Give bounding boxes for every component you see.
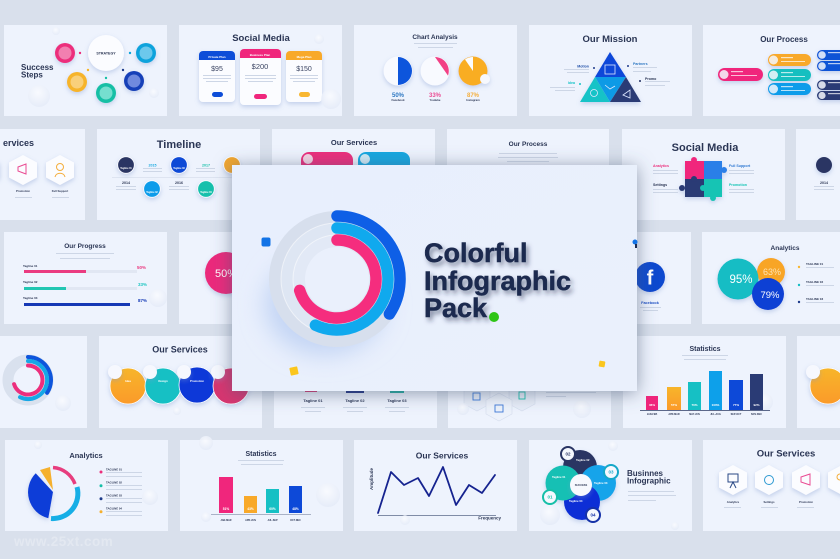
callout labels xyxy=(568,62,657,85)
hexagons xyxy=(719,465,840,495)
orbs xyxy=(34,441,158,505)
body lines xyxy=(628,491,676,501)
bubble values: 79% xyxy=(760,290,780,301)
panel: our services hexagons xyxy=(703,440,840,531)
legend xyxy=(100,468,142,516)
node captions: Tagline 03 xyxy=(173,167,185,170)
progress bars xyxy=(23,264,137,306)
pill text lines xyxy=(731,52,840,94)
heading: Our Process xyxy=(760,35,808,44)
pricing card 1: $95 xyxy=(211,66,223,73)
node xyxy=(816,157,832,173)
axis label: frequency: Frequency xyxy=(478,516,501,520)
panel: chart analysis xyxy=(354,25,517,116)
icon badges xyxy=(108,365,225,379)
orbs xyxy=(314,34,341,109)
percentages xyxy=(137,265,147,303)
years: 2015 xyxy=(148,164,156,168)
process pills xyxy=(718,50,840,100)
heading: ervices xyxy=(3,138,34,148)
legend xyxy=(798,262,834,303)
line series xyxy=(378,467,495,513)
panel: our services pills xyxy=(272,129,435,220)
node captions: Tagline 01 xyxy=(120,167,132,170)
legend: TAGLINE 01 xyxy=(106,468,122,472)
pie 1 xyxy=(384,56,412,86)
panel: our process text xyxy=(447,129,609,220)
bar chart: 60% xyxy=(269,507,276,511)
subtitle lines xyxy=(414,43,457,48)
orb xyxy=(55,395,71,411)
bar chart: OCT-DEC xyxy=(290,519,301,522)
node captions: Tagline 04 xyxy=(200,191,212,194)
years: 2016 xyxy=(175,181,183,185)
facebook circle xyxy=(635,262,665,292)
pricing card 3: $150 xyxy=(296,66,312,73)
cluster labels: Tagline 03 xyxy=(594,481,608,485)
heading: Our Process xyxy=(509,141,548,148)
orbs xyxy=(540,441,679,530)
connector dots xyxy=(79,52,131,79)
ring chart xyxy=(8,357,51,400)
panel: our process pills xyxy=(703,25,840,116)
strategy hub: STRATEGY xyxy=(96,52,116,56)
bar chart: NOV-DEC xyxy=(751,413,762,416)
callout text lines xyxy=(550,67,670,91)
green dot xyxy=(489,312,499,322)
callout labels: Motion xyxy=(577,64,589,68)
pie chart xyxy=(28,467,78,519)
number badges: 04 xyxy=(590,513,596,518)
bar chart: JUL-SEP xyxy=(267,519,278,522)
panel: social media pricing xyxy=(179,25,342,116)
hero title: Infographic xyxy=(424,266,571,296)
orb xyxy=(149,289,167,307)
puzzle labels: Analytics xyxy=(653,164,669,168)
bar chart: APR-MAR xyxy=(668,413,680,416)
panel: our services circles xyxy=(99,336,262,428)
label: Facebook xyxy=(641,301,660,305)
stat circle xyxy=(205,252,247,294)
service labels: Design xyxy=(158,379,168,383)
description lines xyxy=(116,168,215,190)
bar chart: 100% xyxy=(712,403,720,407)
orb xyxy=(173,407,181,415)
puzzle labels: Promotion xyxy=(729,183,747,187)
orb xyxy=(755,393,773,411)
bar chart: APR-JUN xyxy=(245,519,256,522)
percentages: 33% xyxy=(138,282,147,287)
axis label: amplitude: Amplitude xyxy=(369,468,374,490)
bar chart: JUL-AUG xyxy=(710,413,721,416)
heading: Businnes xyxy=(627,469,664,478)
pie labels: Youtube xyxy=(430,98,441,102)
progress bars: Tagline 02 xyxy=(23,280,38,284)
panel: analytics bubbles xyxy=(702,232,840,324)
pricing card 3: Mega Plan xyxy=(297,55,312,59)
heading: Timeline xyxy=(157,139,201,151)
hero title: Colorful xyxy=(424,238,527,268)
bar chart: 57% xyxy=(671,403,677,407)
axis xyxy=(378,514,496,517)
heading: Our Progress xyxy=(64,243,106,250)
pricing card 2: $200 xyxy=(252,62,268,71)
bubble values: 63% xyxy=(763,267,781,277)
heading: Our Mission xyxy=(583,34,638,45)
percentages: 87% xyxy=(138,298,147,303)
pricing card 2: Business Plan xyxy=(250,53,270,57)
progress bars: Tagline 03 xyxy=(23,296,38,300)
panel: orange service cropped xyxy=(797,336,840,428)
pie labels: Facebook xyxy=(391,98,405,102)
captions: Analytics xyxy=(727,500,740,504)
panel: facebook circle stat xyxy=(179,232,342,324)
tagline 01: Tagline 01 xyxy=(303,398,323,403)
subtitle lines xyxy=(682,355,728,360)
bar chart: 70% xyxy=(691,403,698,407)
tagline 02 xyxy=(343,398,367,412)
pricing card 3 xyxy=(286,51,322,102)
tagline 03 xyxy=(385,398,409,412)
bar chart: 48% xyxy=(292,507,299,511)
heading: Social Media xyxy=(672,142,739,154)
panel: line chart xyxy=(354,440,517,531)
heading: Our Services xyxy=(416,450,468,460)
subtitle lines xyxy=(56,253,114,259)
hexagons xyxy=(464,383,535,421)
icon badge xyxy=(806,365,820,379)
center hub: SUCCESS xyxy=(575,483,588,487)
puzzle labels: Full Support xyxy=(729,164,751,168)
step circles xyxy=(55,43,156,103)
ring chart xyxy=(265,211,405,355)
panel: statistics six bars xyxy=(623,336,786,428)
description lines xyxy=(653,170,754,193)
tagline 02: Tagline 02 xyxy=(345,398,365,403)
panel: our mission xyxy=(529,25,692,116)
panel: services hexagons cropped xyxy=(0,129,85,220)
years: 2017 xyxy=(202,164,210,168)
bubble values: 95% xyxy=(729,274,753,286)
tagline 03: Tagline 03 xyxy=(387,398,407,403)
cluster labels: Tagline 01 xyxy=(552,475,566,479)
heading: Our Services xyxy=(152,344,208,354)
panel: taglines xyxy=(274,336,437,428)
service labels: Promotion xyxy=(190,379,204,383)
text lines xyxy=(546,392,596,397)
panel: success steps xyxy=(4,25,167,116)
service labels xyxy=(125,379,204,383)
confetti: yellow square small xyxy=(599,361,605,367)
facebook circle: f xyxy=(647,268,654,290)
captions: Settings xyxy=(763,500,775,504)
number badges xyxy=(543,447,618,522)
heading: Social Media xyxy=(232,33,290,44)
pie labels xyxy=(391,93,480,102)
hex icons xyxy=(18,164,65,177)
pie 2 xyxy=(420,56,450,86)
panel: analytics pie xyxy=(5,440,168,531)
bubble values xyxy=(729,267,781,301)
legend: TAGLINE 03 xyxy=(806,297,823,301)
service circles xyxy=(110,367,249,404)
puzzle labels xyxy=(653,164,751,187)
bar chart: 51% xyxy=(223,507,229,511)
hex icons xyxy=(728,474,840,488)
heading: Statistics xyxy=(689,346,721,353)
panel: facebook icon xyxy=(528,232,691,324)
pie labels: 87% xyxy=(467,93,480,99)
year: 2014 xyxy=(820,181,828,185)
cluster labels: Tagline 04 xyxy=(569,499,583,503)
bar chart: MAY-JUN xyxy=(689,413,700,416)
pricing card 2 xyxy=(240,49,281,105)
legend: TAGLINE 04 xyxy=(106,506,122,510)
percentages: 50% xyxy=(137,265,146,270)
circle cluster xyxy=(546,450,616,520)
axis line xyxy=(112,176,242,179)
node captions xyxy=(120,167,212,194)
bar chart: JAN-MAR xyxy=(220,519,232,522)
confetti: yellow square large xyxy=(289,366,299,376)
legend: TAGLINE 02 xyxy=(806,280,823,284)
progress bars: Tagline 01 xyxy=(23,264,38,268)
panel: timeline xyxy=(97,129,260,220)
years xyxy=(122,164,210,185)
captions: Promotion xyxy=(799,500,813,504)
strategy hub xyxy=(88,35,124,71)
pie labels: 50% xyxy=(392,93,405,99)
timeline nodes xyxy=(118,157,240,197)
callout labels: Idea xyxy=(568,81,576,85)
bar chart: JAN-FEB xyxy=(647,413,657,416)
pricing card 1 xyxy=(199,51,235,102)
node captions: Tagline 02 xyxy=(146,191,158,194)
peek of icons xyxy=(305,388,404,393)
service labels: Idea xyxy=(125,379,131,383)
panel: statistics four bars xyxy=(180,436,343,531)
heading: success steps: Steps xyxy=(21,70,43,80)
bar chart: 92% xyxy=(753,403,760,407)
confetti: blue square xyxy=(262,238,270,246)
number badges: 02 xyxy=(565,452,571,457)
bar chart: 36% xyxy=(649,403,655,407)
legend: TAGLINE 01 xyxy=(806,262,823,266)
number badges: 03 xyxy=(608,470,614,475)
captions: Promotion xyxy=(16,189,30,193)
legend: TAGLINE 02 xyxy=(106,480,122,484)
bubbles xyxy=(718,258,785,310)
subtitle lines xyxy=(238,460,284,465)
hex icons xyxy=(473,392,525,412)
callout labels: Partners xyxy=(633,62,648,66)
pie labels: 33% xyxy=(429,93,442,99)
bar chart: 43% xyxy=(247,507,254,511)
description lines xyxy=(814,186,834,190)
puzzle xyxy=(679,157,727,201)
orb xyxy=(400,515,410,525)
confetti: blue edge mark xyxy=(632,240,638,248)
callout dots xyxy=(579,65,641,85)
orbs xyxy=(28,27,159,107)
panel: hexagon cluster xyxy=(448,336,611,428)
pie labels: Instagram xyxy=(466,98,480,102)
panel: mini ring chart xyxy=(0,336,87,428)
pricing card 1: Private Plan xyxy=(208,55,226,59)
orange circle xyxy=(810,368,840,404)
puzzle labels: Settings xyxy=(653,183,667,187)
pill number badges xyxy=(720,51,826,99)
center hub xyxy=(570,474,592,496)
hero card xyxy=(232,165,638,391)
panel: social media puzzle xyxy=(622,129,785,220)
stat circle: 50% xyxy=(215,268,237,280)
pie 3 xyxy=(458,56,490,86)
orbs xyxy=(457,400,591,418)
cluster labels: Tagline 02 xyxy=(576,458,590,462)
triangle diagram xyxy=(580,52,641,102)
heading: Chart Analysis xyxy=(412,34,458,41)
cluster labels xyxy=(552,458,608,503)
watermark: www.25xt.com xyxy=(13,534,113,549)
bar chart: 77% xyxy=(733,403,739,407)
legend: TAGLINE 03 xyxy=(106,494,122,498)
orbs xyxy=(199,436,340,522)
heading: Infographic xyxy=(627,476,671,486)
panel: business infographic xyxy=(529,440,692,531)
callout labels: Promo xyxy=(645,77,657,81)
captions xyxy=(15,189,69,198)
captions: Full Support xyxy=(52,189,68,193)
heading: Our Services xyxy=(331,138,377,147)
number badges: 01 xyxy=(547,495,553,500)
description lines xyxy=(640,307,661,311)
subtitle lines xyxy=(498,153,558,162)
captions xyxy=(724,500,814,508)
triangle icons xyxy=(590,65,630,98)
heading: Analytics xyxy=(771,245,800,252)
years: 2014 xyxy=(122,181,130,185)
bar chart xyxy=(211,477,311,522)
panel: our progress xyxy=(4,232,167,324)
heading: Our Services xyxy=(757,448,815,460)
panel: timeline cropped xyxy=(796,129,840,220)
service pills xyxy=(301,152,410,172)
hero title: Pack xyxy=(424,293,488,323)
bar chart: SEP-OCT xyxy=(731,413,742,416)
tagline 01 xyxy=(301,398,325,412)
bar chart xyxy=(640,371,770,416)
heading: success steps: Success xyxy=(21,63,54,72)
hexagons xyxy=(0,155,74,185)
heading: Statistics xyxy=(245,451,277,458)
heading: Analytics xyxy=(69,451,103,460)
